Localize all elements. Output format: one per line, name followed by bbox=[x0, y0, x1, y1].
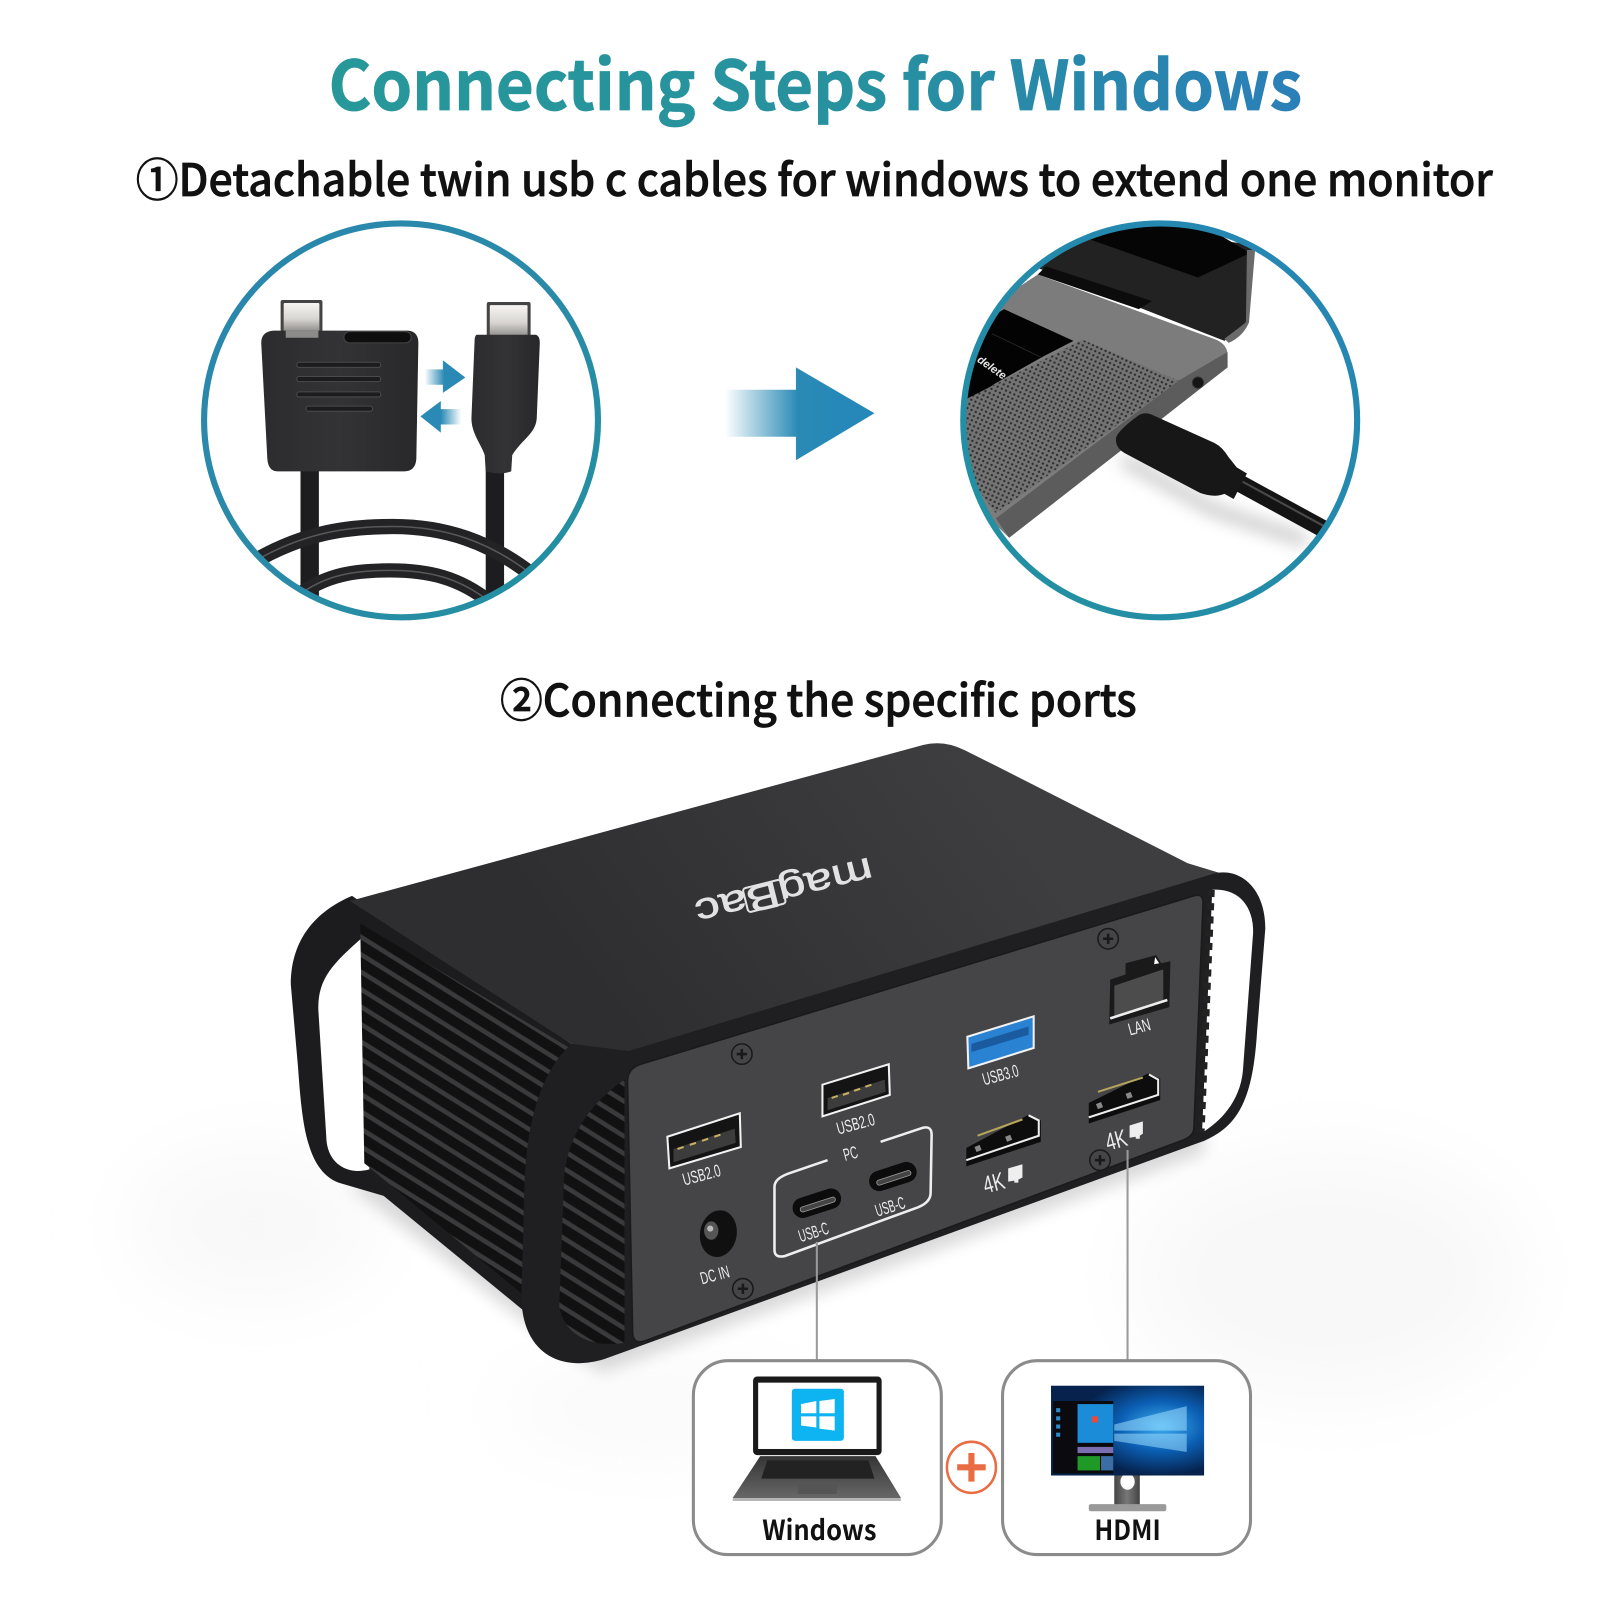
label: 4K bbox=[980, 1168, 1008, 1199]
arrow: big gradient bbox=[727, 367, 874, 460]
rear ring opening bbox=[318, 937, 369, 1171]
pc bracket bbox=[774, 1127, 932, 1257]
port: usb 3.0 bbox=[967, 1016, 1034, 1068]
leader line: hdmi bbox=[1127, 1150, 1129, 1361]
connector: twin plug metal bbox=[281, 300, 322, 332]
brand logo bbox=[691, 850, 877, 933]
laptop base side bbox=[996, 352, 1228, 538]
leader line: windows bbox=[816, 1242, 818, 1361]
hinge bar bbox=[1038, 266, 1152, 309]
card: windows bbox=[693, 1361, 941, 1555]
cable: left tail bbox=[300, 471, 319, 596]
icon: laptop bbox=[733, 1377, 901, 1501]
arrow: left bbox=[420, 401, 461, 433]
brand logo: magBac bbox=[691, 850, 877, 933]
port: hdmi one bbox=[966, 1115, 1041, 1166]
cable: upper loop bbox=[251, 527, 536, 578]
rear ring bbox=[291, 896, 571, 1316]
port: usb-c two bbox=[866, 1159, 919, 1194]
usb-c plug bbox=[1116, 413, 1247, 499]
laptop screen bbox=[1040, 240, 1253, 341]
docking station bbox=[291, 743, 1265, 1372]
label: USB2.0 bbox=[680, 1160, 723, 1189]
label: USB3.0 bbox=[980, 1060, 1021, 1089]
icon: monitor bbox=[1130, 1121, 1143, 1139]
label: windows: Windows bbox=[762, 1508, 877, 1548]
front frame bbox=[521, 872, 1265, 1363]
cable shadow bbox=[1122, 459, 1306, 541]
right fin edge bbox=[1201, 890, 1211, 1133]
arrow: right bbox=[426, 360, 465, 393]
panel: detachable twin cable circle bbox=[204, 223, 598, 617]
front fin window bbox=[559, 1080, 624, 1344]
side fins bbox=[360, 923, 571, 1296]
panel: laptop with cable circle bbox=[959, 219, 1357, 617]
step 1 heading: ①Detachable twin usb c cables for windows to extend one monitor bbox=[136, 144, 1493, 209]
card: hdmi bbox=[1003, 1361, 1251, 1555]
icon: monitor bbox=[1051, 1386, 1204, 1511]
circle outline bbox=[963, 223, 1357, 617]
label: USB2.0 bbox=[834, 1109, 877, 1138]
connector: block ridges bbox=[297, 362, 381, 411]
connector: plug collar bbox=[286, 331, 318, 338]
connector: single plug metal bbox=[487, 302, 531, 337]
port: hdmi two bbox=[1089, 1073, 1160, 1123]
label: hdmi: HDMI bbox=[1094, 1508, 1161, 1548]
port: usb 2.0 left bbox=[667, 1113, 741, 1168]
screws bbox=[732, 929, 1118, 1299]
top face bbox=[350, 743, 1221, 1067]
cable: right tail bbox=[486, 464, 504, 607]
port: usb 2.0 middle bbox=[822, 1064, 890, 1116]
port: lan bbox=[1109, 955, 1170, 1024]
keyboard keys bbox=[968, 309, 1074, 398]
laptop base bbox=[959, 274, 1228, 538]
ambient shadow bbox=[133, 1153, 1520, 1444]
title: Connecting Steps for Windows bbox=[329, 31, 1302, 130]
cable bbox=[1237, 480, 1327, 531]
icon: monitor bbox=[1008, 1164, 1022, 1183]
delete key label: delete bbox=[975, 354, 1008, 382]
front panel bbox=[628, 895, 1203, 1342]
port: dc in bbox=[696, 1207, 741, 1260]
icon: plus bbox=[947, 1442, 996, 1493]
label: LAN bbox=[1126, 1014, 1153, 1039]
step 2 heading: ②Connecting the specific ports bbox=[500, 664, 1137, 729]
cable: lower loop bbox=[296, 570, 490, 602]
label: DC IN bbox=[698, 1261, 732, 1288]
connector: block socket bbox=[344, 332, 411, 343]
label: USB-C bbox=[796, 1218, 831, 1246]
label: PC bbox=[841, 1142, 860, 1165]
headphone jack bbox=[1192, 377, 1204, 388]
connector: twin block bbox=[261, 331, 418, 471]
speaker grille bbox=[964, 340, 1179, 513]
port: usb-c one bbox=[790, 1186, 844, 1221]
circle outline bbox=[204, 223, 598, 617]
label: 4K bbox=[1103, 1125, 1131, 1157]
contact shadow bbox=[347, 1112, 1204, 1372]
right opening bbox=[1202, 890, 1253, 1133]
label: USB-C bbox=[873, 1192, 908, 1221]
connector: single plug body bbox=[471, 335, 540, 473]
